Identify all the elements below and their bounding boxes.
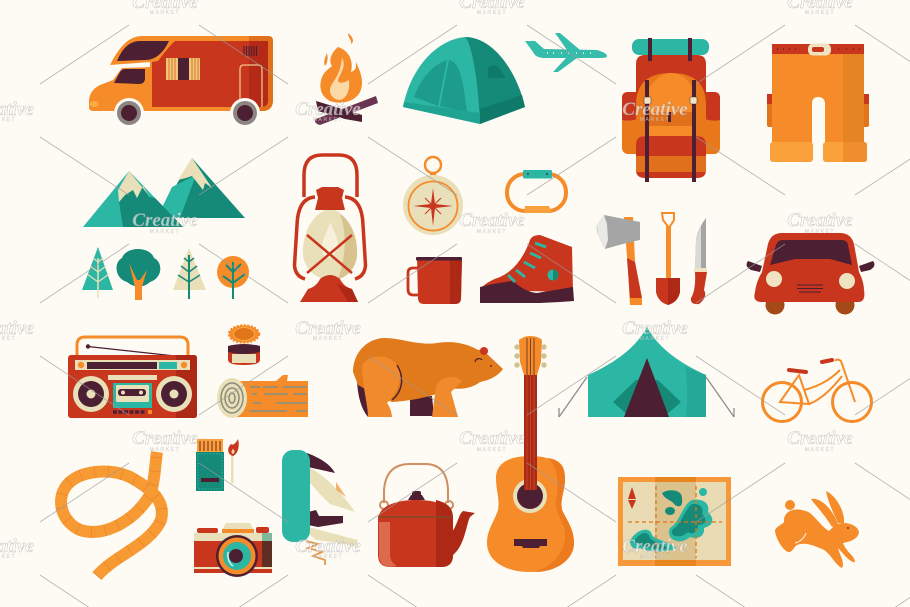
icon: enamel mug bbox=[408, 257, 462, 304]
watermark: Creative Market text: MARKET bbox=[805, 447, 835, 453]
icon: pocket knife bbox=[282, 450, 358, 565]
watermark: Creative Market text: MARKET bbox=[150, 447, 180, 453]
icon: red car bbox=[747, 233, 874, 314]
watermark: Creative Market text: MARKET bbox=[640, 554, 670, 560]
icon: burning match bbox=[228, 439, 239, 483]
watermark: Creative Market text: MARKET bbox=[805, 229, 835, 235]
watermark: Creative Market text: MARKET bbox=[313, 554, 343, 560]
icon: hunting knife bbox=[691, 218, 707, 304]
icon: wooden log bbox=[217, 375, 308, 418]
watermark: Creative Market text: Creative bbox=[295, 99, 361, 120]
watermark: Creative Market text: Creative bbox=[459, 210, 525, 231]
watermark: Creative Market text: MARKET bbox=[477, 229, 507, 235]
icon: orange round tree bbox=[217, 256, 249, 299]
watermark: Creative Market text: MARKET bbox=[477, 10, 507, 16]
icon: coiled rope bbox=[61, 452, 162, 576]
watermark: Creative Market text: Creative bbox=[295, 318, 361, 339]
icon: round tree bbox=[117, 249, 160, 300]
icon: mountains bbox=[83, 158, 245, 227]
watermark: Creative Market text: Creative bbox=[132, 428, 198, 449]
icon: compass bbox=[403, 157, 463, 235]
watermark: Creative Market text: Creative bbox=[622, 99, 688, 120]
icon: boombox radio bbox=[68, 337, 197, 418]
watermark: Creative Market text: MARKET bbox=[640, 117, 670, 123]
icon: canvas tent bbox=[559, 327, 734, 417]
icon: carabiner bbox=[507, 170, 566, 213]
icon: tin can bbox=[228, 326, 260, 365]
icon: matchbox bbox=[196, 439, 224, 491]
icon: retro camera bbox=[194, 523, 272, 577]
icon: campfire bbox=[315, 33, 378, 125]
watermark: Creative Market text: Creative bbox=[132, 210, 198, 231]
watermark: Creative Market text: Creative bbox=[787, 428, 853, 449]
watermark: Creative Market text: Creative bbox=[622, 536, 688, 557]
icon: hiking boot bbox=[480, 235, 574, 303]
icon: cream fir tree bbox=[173, 248, 206, 299]
icon: axe bbox=[597, 215, 642, 305]
icon: treasure map bbox=[618, 477, 731, 566]
icon: acoustic guitar bbox=[487, 336, 574, 572]
icon: shovel bbox=[656, 213, 680, 305]
watermark: Creative Market text: MARKET bbox=[313, 117, 343, 123]
watermark: Creative Market text: Creative bbox=[787, 210, 853, 231]
icon: camper van bbox=[89, 36, 273, 128]
watermark: Creative Market text: MARKET bbox=[477, 447, 507, 453]
icon: backpack bbox=[622, 38, 720, 182]
watermark: Creative Market text: Creative bbox=[295, 536, 361, 557]
watermark: Creative Market text: MARKET bbox=[805, 10, 835, 16]
icon: oil lantern bbox=[294, 155, 366, 302]
icon: airplane bbox=[525, 33, 607, 72]
watermark: Creative Market text: MARKET bbox=[150, 10, 180, 16]
icon: shorts bbox=[767, 44, 869, 162]
icon: pine tree bbox=[82, 247, 113, 298]
watermark: Creative Market text: Creative bbox=[459, 428, 525, 449]
icon: brown bear bbox=[353, 338, 503, 417]
watermark: Creative Market text: Creative bbox=[622, 318, 688, 339]
watermark: Creative Market text: MARKET bbox=[313, 336, 343, 342]
icon: dome tent bbox=[403, 37, 525, 124]
icon: kettle bbox=[378, 464, 475, 567]
watermark: Creative Market text: MARKET bbox=[640, 336, 670, 342]
icon: jumping rabbit bbox=[775, 491, 859, 568]
icon: bicycle bbox=[762, 360, 872, 422]
watermark: Creative Market text: MARKET bbox=[150, 229, 180, 235]
